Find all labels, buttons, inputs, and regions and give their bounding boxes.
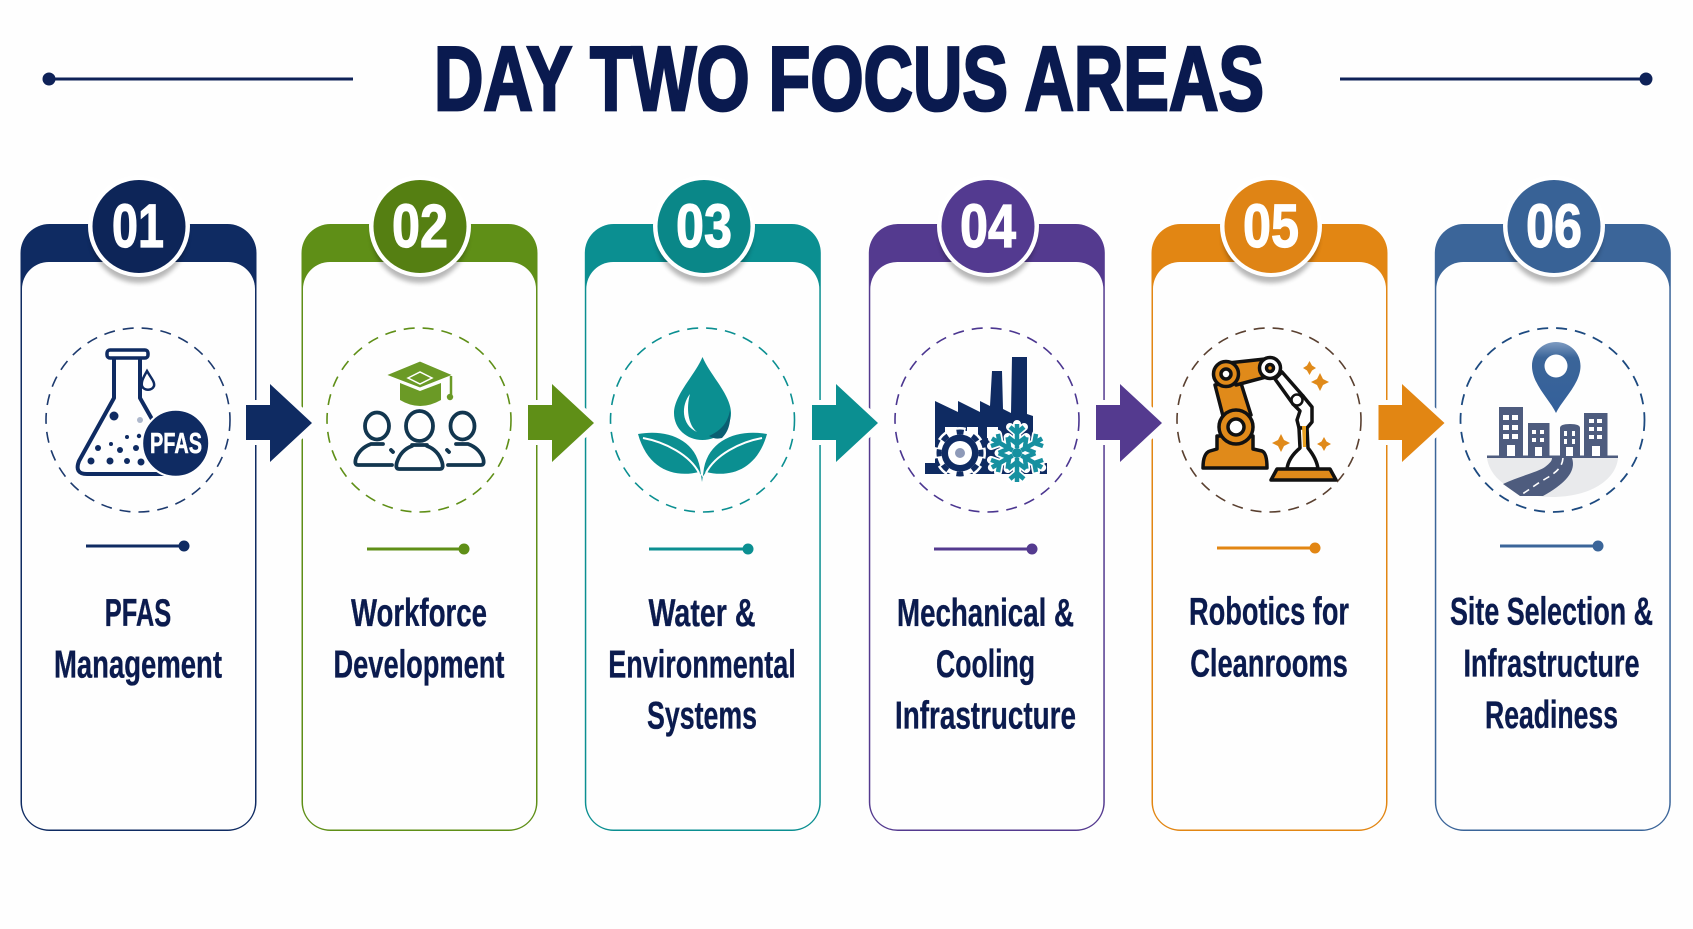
icon: water drop and leaves xyxy=(638,357,767,482)
label: Cleanrooms xyxy=(1190,642,1348,686)
number 05: 05 xyxy=(1243,192,1299,260)
arrow 4 to 5 xyxy=(1096,384,1162,462)
label: Management xyxy=(54,644,222,686)
number 03: 03 xyxy=(676,192,732,260)
arrow 5 to 6 xyxy=(1378,384,1444,462)
title: DAY TWO FOCUS AREAS xyxy=(434,29,1264,130)
label: Workforce xyxy=(351,592,487,635)
number 04: 04 xyxy=(960,192,1016,260)
label: Environmental xyxy=(608,644,796,686)
label: Robotics for xyxy=(1189,590,1349,634)
title rule left xyxy=(43,73,353,85)
label: Systems xyxy=(647,694,757,738)
icon: graduation cap and people xyxy=(355,361,484,469)
label xyxy=(1189,590,1349,686)
icon: factory with gear and snowflake xyxy=(925,357,1047,482)
icon: flask with PFAS badge: PFAS xyxy=(150,428,202,460)
label xyxy=(334,592,504,686)
label: PFAS xyxy=(105,592,171,635)
icon: location pin and city xyxy=(1487,342,1618,497)
icon: robot arm xyxy=(1203,358,1336,480)
label xyxy=(54,592,222,686)
label xyxy=(1450,590,1653,737)
label: Cooling xyxy=(936,643,1035,686)
arrow 1 to 2 xyxy=(246,384,312,462)
panel: 05 Robotics for Cleanrooms xyxy=(1152,175,1388,831)
arrow 2 to 3 xyxy=(528,384,594,462)
title rule right xyxy=(1340,73,1652,85)
label xyxy=(895,592,1076,738)
number 02: 02 xyxy=(392,192,448,260)
label: Mechanical & xyxy=(897,592,1074,635)
arrow 3 to 4 xyxy=(812,384,878,462)
panel: 02 Workforce Development xyxy=(302,175,538,831)
panel: 03 Water & Environmental Systems xyxy=(585,175,821,831)
number 01: 01 xyxy=(112,192,164,260)
label: Development xyxy=(334,644,504,686)
label: Readiness xyxy=(1485,694,1618,737)
label: Infrastructure xyxy=(895,694,1076,738)
icon: flask with PFAS badge xyxy=(78,350,209,477)
number 06: 06 xyxy=(1526,192,1582,260)
label: Water & xyxy=(648,592,756,635)
panel: 04 Mechanical & Cooling Infrastructure xyxy=(869,175,1105,831)
label xyxy=(608,592,796,738)
panel: 06 Site Selection & Infrastructure Readiness xyxy=(1435,175,1671,831)
panel: 01 PFAS Management xyxy=(20,175,256,831)
